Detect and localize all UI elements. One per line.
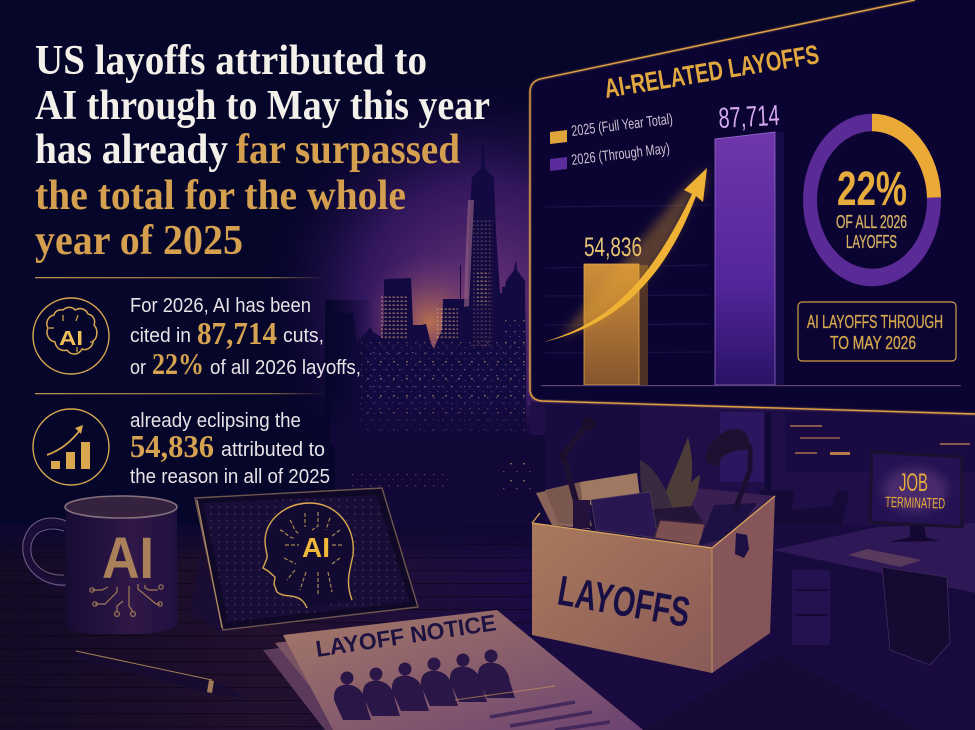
- text block: 2026 stat: For 2026, AI has been: [130, 295, 311, 317]
- icon: rising bars: [33, 409, 109, 485]
- donut label: LAYOFFS: [846, 232, 897, 252]
- text block: 2025 comparison: [130, 410, 330, 488]
- mug circuit: [90, 584, 163, 616]
- text block: 2025 comparison: attributed to: [221, 439, 325, 461]
- bar: 2025: [584, 232, 648, 385]
- bar: 2026: [715, 100, 784, 385]
- monitor: job terminated: JOB: [899, 469, 928, 497]
- text block: 2026 stat: cited in: [130, 325, 191, 347]
- bar: 2025: 54,836: [584, 232, 642, 262]
- legend: 2026 (Through May): [570, 140, 671, 169]
- tablet AI lettering: AI: [302, 532, 330, 563]
- donut label: OF ALL 2026: [836, 212, 907, 232]
- office background with windows: [335, 402, 975, 572]
- title: far surpassed: [236, 127, 460, 173]
- title: has already: [35, 127, 228, 173]
- monitor: job terminated: [870, 452, 962, 542]
- callout: [798, 302, 956, 361]
- icon: AI brain: [33, 298, 109, 374]
- text block: 2026 stat: [130, 295, 361, 381]
- bar: 2026: 87,714: [718, 100, 780, 135]
- text block: 2025 comparison: 54,836: [130, 428, 214, 464]
- growth arrow: [544, 168, 707, 342]
- title: year of 2025: [35, 218, 243, 264]
- pen: [75, 651, 248, 698]
- title: [35, 38, 490, 264]
- mug: [23, 496, 177, 634]
- text block: 2026 stat: 87,714: [197, 315, 277, 351]
- legend: [550, 111, 674, 171]
- notice heading: LAYOFF NOTICE: [314, 609, 498, 662]
- text block: 2025 comparison: already eclipsing the: [130, 410, 301, 432]
- text block: 2026 stat: cuts,: [283, 325, 324, 347]
- baseline: [541, 385, 961, 386]
- title: AI through to May this year: [35, 83, 490, 129]
- callout: TO MAY 2026: [830, 333, 916, 353]
- title: US layoffs attributed to: [35, 38, 427, 84]
- box label: LAYOFFS: [554, 567, 694, 636]
- text block: 2025 comparison: the reason in all of 2025: [130, 466, 330, 488]
- tablet head icon: [263, 503, 353, 608]
- desk surface: [0, 525, 975, 730]
- city skyline: [325, 145, 530, 450]
- tablet: [190, 488, 418, 634]
- box contents: lamp, plant, folders: [536, 417, 775, 548]
- office desk and chair: [773, 523, 975, 665]
- text block: 2026 stat: 22%: [152, 346, 204, 381]
- donut chart: [810, 122, 934, 278]
- layoff notice papers: [263, 609, 643, 730]
- title: the total for the whole: [35, 173, 406, 219]
- icon: AI brain: AI: [59, 328, 83, 350]
- cardboard box: [532, 496, 775, 673]
- panel: AI-related layoffs screen: [530, 0, 975, 414]
- mug AI lettering: AI: [102, 526, 154, 591]
- screen heading: AI-RELATED LAYOFFS: [602, 39, 821, 104]
- text block: 2026 stat: of all 2026 layoffs,: [210, 357, 361, 379]
- legend: 2025 (Full Year Total): [570, 111, 674, 140]
- donut label: [836, 163, 907, 252]
- donut label: 22%: [837, 163, 907, 216]
- staff silhouettes: [334, 650, 515, 720]
- text block: 2026 stat: or: [130, 357, 146, 379]
